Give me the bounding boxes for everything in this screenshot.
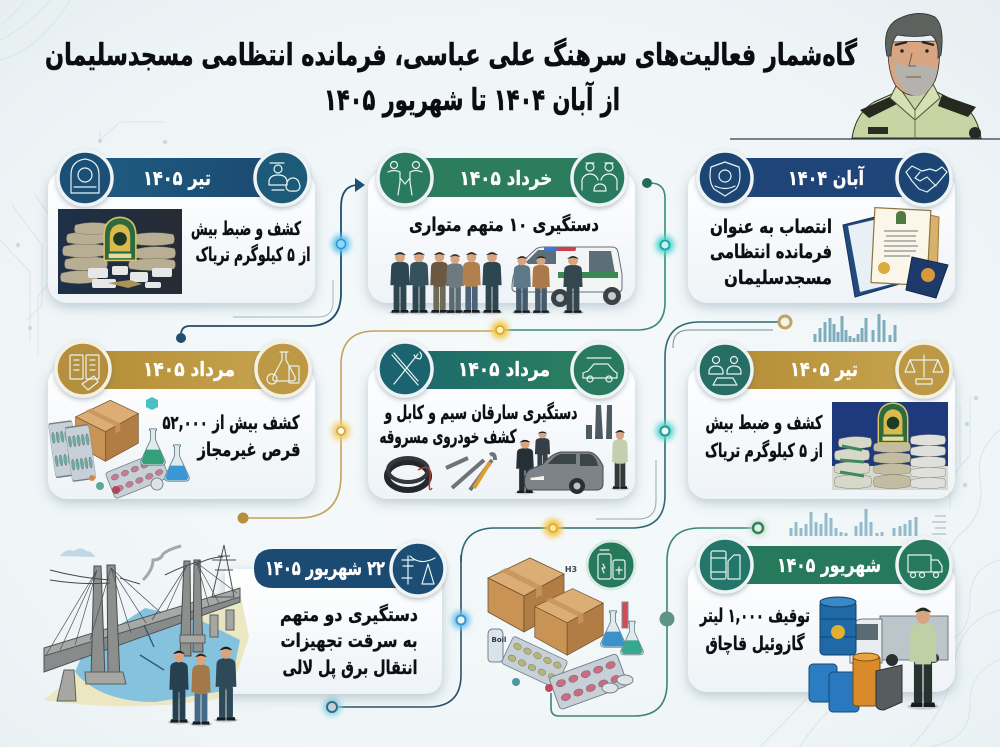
text: theft arrest: دستگیری سارقان سیم و کابل و (384, 401, 578, 424)
icon: truck (897, 538, 951, 592)
text: suspects arrest: دستگیری دو متهم (280, 603, 418, 626)
bar chart: top right (815, 314, 895, 342)
connectors (176, 178, 791, 716)
text: opium seizure: کشف و ضبط بیش (191, 218, 302, 240)
card (48, 170, 315, 303)
icon: pill packs (56, 342, 110, 396)
month label: تیر ۱۴۰۵ (143, 166, 211, 190)
illustration: box and medicine (48, 397, 189, 499)
header rule (730, 138, 1000, 140)
node: blue ring (452, 611, 470, 629)
illustration: bridge (44, 545, 249, 726)
month label: خرداد ۱۴۰۵ (460, 166, 552, 190)
title (45, 37, 857, 118)
card (688, 562, 955, 692)
illustration: documents (843, 208, 948, 298)
icon: officer and bag (255, 151, 309, 205)
photo: seized sacks with emblem (832, 402, 948, 490)
illustration: cables and tools (387, 454, 495, 490)
thin line center (596, 460, 656, 519)
month label: مرداد ۱۴۰۵ (143, 357, 235, 381)
panel: تیر ۱۴۰۵ (left): از ۵ کیلوگرم تریاک (196, 243, 310, 266)
icon: police badge (698, 151, 752, 205)
node: teal ring (656, 422, 674, 440)
panel: آبان ۱۴۰۴ (688, 151, 955, 303)
connector: gold left (243, 331, 500, 518)
icon: barrel and jerry can (698, 538, 752, 592)
node: blue glow (332, 235, 350, 253)
panel: مرداد ۱۴۰۵ (left): قرص غیرمجاز (197, 439, 300, 461)
decorative circuit lines left (0, 0, 167, 356)
icon: officers (572, 151, 626, 205)
icon: flask and pills (256, 342, 310, 396)
icon: bottles (587, 541, 635, 589)
bar chart: bottom right (791, 509, 946, 536)
month label: شهریور ۱۴۰۵ (777, 553, 881, 577)
header bar (95, 351, 270, 389)
node: green solid (660, 612, 674, 626)
connector: green top (500, 183, 665, 330)
text: pills seizure: کشف بیش از ۵۲,۰۰۰ (163, 412, 300, 434)
connector: green bottom (551, 528, 758, 716)
node: amber (544, 519, 562, 537)
node: end gold (238, 512, 248, 524)
icon: car and wrench (572, 343, 626, 397)
card (688, 365, 955, 499)
header bar (735, 351, 910, 389)
icon: officers (698, 343, 752, 397)
month label: آبان ۱۴۰۴ (788, 165, 865, 190)
month label: تیر ۱۴۰۵ (790, 357, 858, 381)
node: gold ring (779, 316, 791, 328)
panel: مرداد ۱۴۰۵ (left) (48, 342, 315, 499)
card (48, 365, 315, 499)
node: teal glow (656, 236, 674, 254)
node: gold left (332, 422, 350, 440)
header bar (735, 546, 910, 584)
photo: seized sacks (58, 209, 182, 294)
panel: مرداد ۱۴۰۵ (center) (368, 342, 635, 499)
icon: handshake (897, 151, 951, 205)
header bar (254, 549, 410, 588)
illustration: van (512, 247, 622, 307)
card (688, 170, 955, 303)
header bar (415, 158, 590, 197)
connector: navy to arrow (181, 185, 357, 338)
decorative arabesque right (760, 395, 1000, 747)
header bar (415, 351, 590, 389)
arrow head (355, 178, 365, 192)
illustration: truck (850, 616, 948, 666)
thin line right top (673, 330, 773, 348)
title line 2: از آبان ۱۴۰۴ تا شهریور ۱۴۰۵ (324, 81, 620, 118)
text: appointment: انتصاب به عنوان (710, 216, 832, 238)
illustration: boxes and medicine (center bottom): H3 (565, 565, 577, 574)
connector: teal right to bottom (461, 322, 785, 562)
card: ۲۲ شهریور ۱۴۰۵ (225, 569, 442, 694)
icon: two people (378, 151, 432, 205)
text: fuel seizure: توقیف ۱,۰۰۰ لیتر (699, 605, 810, 627)
date label: ۲۲ شهریور ۱۴۰۵ (265, 556, 385, 580)
icon: emblem (58, 151, 112, 205)
panel: تیر ۱۴۰۵ (left) (48, 151, 315, 303)
panel: شهریور ۱۴۰۵ (688, 538, 955, 712)
panel: ۲۲ شهریور ۱۴۰۵: به سرقت تجهیزات (280, 630, 418, 652)
card (368, 365, 635, 499)
panel: ۲۲ شهریور ۱۴۰۵ (254, 542, 445, 679)
card (368, 170, 635, 303)
connector: navy bottom (332, 555, 461, 707)
illustration: barrels (809, 597, 902, 712)
node: green ring (750, 520, 766, 536)
panel: آبان ۱۴۰۴: فرمانده انتظامی (710, 241, 832, 263)
panel: آبان ۱۴۰۴: مسجدسلیمان (724, 267, 832, 289)
illustration: officers and suspects (389, 252, 584, 314)
text: arrest: دستگیری ۱۰ متهم متواری (409, 213, 599, 236)
icon: tools (378, 342, 432, 396)
panel: ۲۲ شهریور ۱۴۰۵: انتقال برق پل لالی (282, 657, 418, 679)
node: navy ring (323, 698, 341, 716)
panel: تیر ۱۴۰۵ (right) (688, 343, 955, 499)
node: start green (642, 178, 652, 188)
icon: power tower (391, 542, 445, 596)
illustration: boxes and medicine (center bottom): Boil (492, 636, 506, 644)
panel: خرداد ۱۴۰۵ (368, 151, 635, 314)
panel: تیر ۱۴۰۵ (right): از ۵ کیلوگرم تریاک (705, 439, 823, 462)
panel: شهریور ۱۴۰۵: گازوئیل قاچاق (706, 632, 805, 655)
illustration: boxes and medicine (center bottom) (488, 541, 643, 710)
header bar (95, 158, 270, 197)
thin line left (233, 280, 333, 317)
month label: مرداد ۱۴۰۵ (458, 357, 550, 381)
panel: مرداد ۱۴۰۵ (center): کشف خودروی مسروقه (380, 426, 517, 448)
text: opium seizure: کشف و ضبط بیش (706, 412, 823, 434)
illustration: officers and car (515, 405, 629, 494)
node: end navy (176, 333, 186, 343)
portrait: commander (852, 13, 981, 139)
node: yellow (491, 321, 509, 339)
illustration: officer (907, 608, 939, 710)
icon: scales (897, 343, 951, 397)
header bar (735, 158, 910, 197)
